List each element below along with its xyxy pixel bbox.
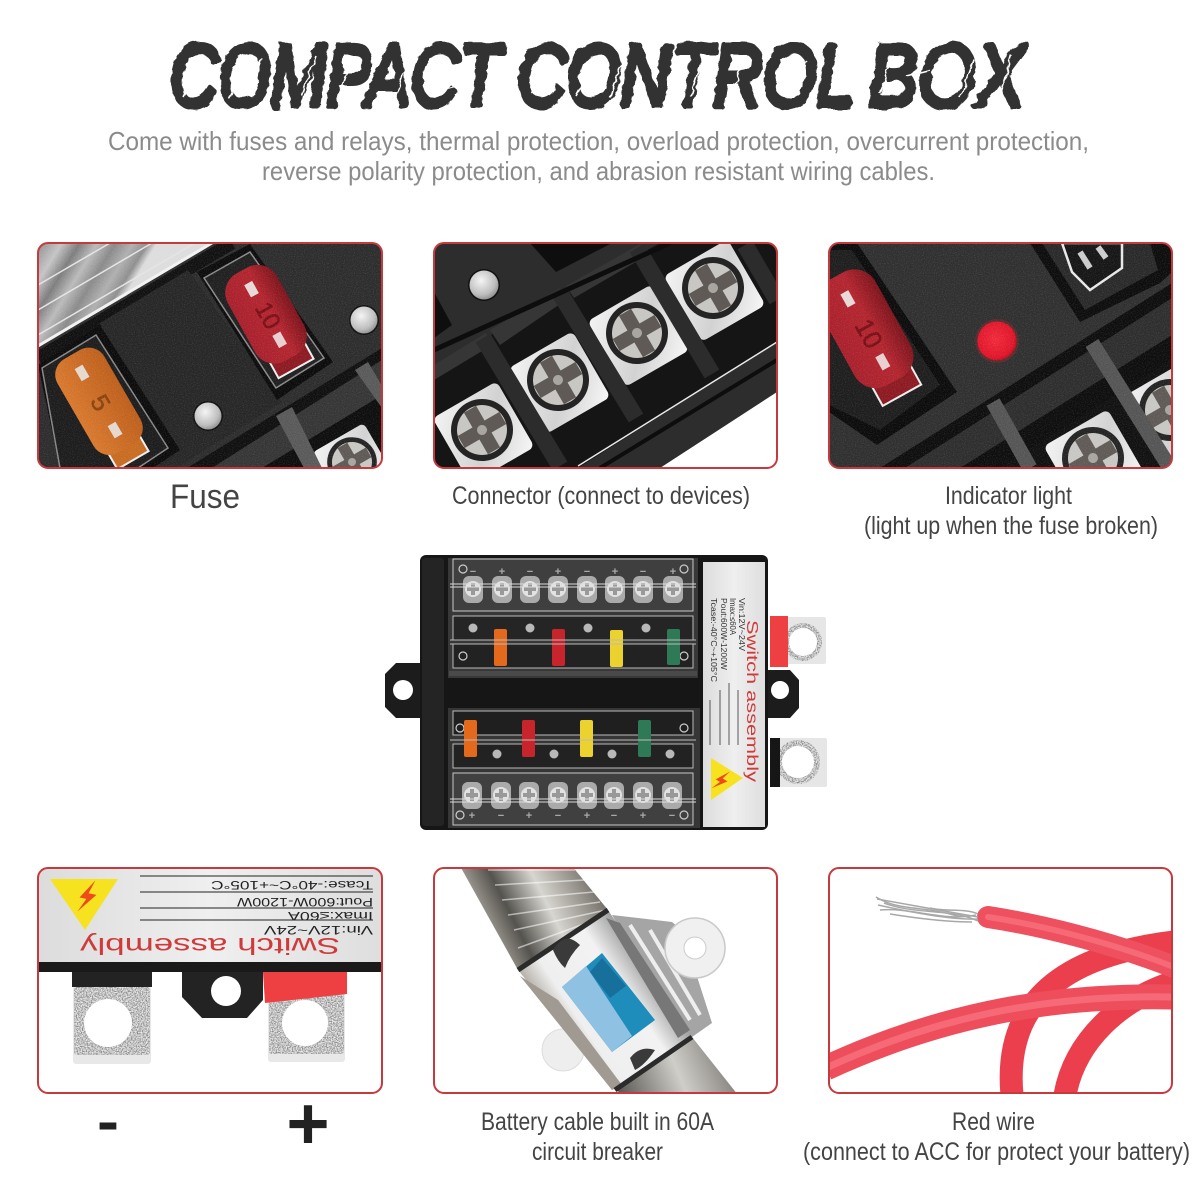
upper clear section: + — [499, 566, 505, 578]
spec label: Imax:≤60A — [728, 598, 738, 635]
red LED — [975, 319, 1019, 363]
label: Indicator light: (light up when the fuse broken) — [864, 512, 1158, 540]
threaded tube bottom — [615, 1037, 738, 1095]
clear cover — [38, 243, 212, 346]
panel: connector photo — [432, 239, 777, 484]
blue fuse — [562, 953, 655, 1052]
label: Fuse: Fuse — [170, 478, 240, 516]
polarity sign: plus: + — [286, 1082, 330, 1165]
red fuse holder — [829, 243, 957, 445]
positive terminal — [770, 616, 826, 667]
terminal screw — [314, 424, 381, 467]
top rails — [435, 334, 487, 380]
rivet — [468, 269, 500, 301]
label: Indicator light — [864, 482, 1158, 540]
warning triangle — [50, 879, 118, 930]
lower clear section — [448, 708, 700, 828]
screw terminals — [1046, 411, 1141, 467]
dark reflections — [553, 939, 580, 968]
threaded tube top — [460, 866, 608, 970]
wire loops — [1011, 942, 1174, 1095]
upper clear section: − — [584, 566, 590, 578]
orange fuse holder — [39, 328, 180, 467]
clear housing — [518, 910, 692, 1090]
lower ear — [542, 1029, 584, 1071]
upper clear section: + — [612, 566, 618, 578]
bracket — [612, 915, 712, 1037]
red fuse — [830, 269, 922, 408]
red fuse holder — [197, 244, 333, 400]
product: control box — [385, 555, 827, 830]
red fuse — [225, 264, 315, 380]
upper clear section: + — [555, 566, 561, 578]
upper clear section — [448, 558, 698, 678]
subtitle: reverse polarity protection, and abrasion resistant wiring cables. — [262, 156, 935, 186]
separators — [993, 343, 1170, 468]
negative terminal — [770, 738, 827, 787]
upper clear section: + — [670, 566, 676, 578]
upper clear section: − — [640, 566, 646, 578]
panel: fuse photo — [37, 242, 383, 469]
label: Red wire: Red wire — [952, 1108, 1035, 1136]
subtitle: Come with fuses and relays, thermal protection, overload protection, overcurrent protection, — [108, 126, 1089, 156]
spec lines — [140, 876, 373, 920]
title: BOX — [868, 26, 1028, 125]
negative lug — [73, 986, 151, 1064]
lower clear section: + — [640, 810, 646, 822]
upside-down spec text: Vin:12V~24V — [263, 923, 373, 935]
title — [170, 26, 1028, 125]
lower clear section: − — [669, 810, 675, 822]
red fuse: 10 — [249, 298, 286, 334]
upper clear section: − — [527, 566, 533, 578]
panel: circuit breaker photo — [434, 866, 777, 1095]
lower clear section: + — [469, 810, 475, 822]
label: Battery cable — [481, 1108, 714, 1166]
label: Battery cable: circuit breaker — [532, 1138, 663, 1166]
upside-down spec text: Pout:600W-1200W — [237, 895, 373, 907]
orange fuse: 5 — [84, 390, 116, 416]
upside-down spec text — [211, 878, 373, 935]
top wire — [988, 917, 1174, 967]
red fuse: 10 — [849, 314, 889, 353]
front edge — [578, 342, 777, 468]
top fuse holder — [1030, 243, 1172, 322]
positive lug — [268, 990, 345, 1062]
lower clear section: − — [555, 810, 561, 822]
ears — [385, 663, 420, 718]
label: Connector: Connector (connect to devices) — [452, 482, 750, 510]
lower clear section: − — [498, 810, 504, 822]
panel: terminals photo: Switch assembly — [79, 933, 340, 959]
center plate — [100, 270, 191, 328]
spec label — [703, 562, 765, 827]
panel: red wire photo — [826, 868, 1174, 1095]
mounting ear — [182, 972, 263, 1018]
upper clear section: − — [470, 566, 476, 578]
spec label: Vin:12V~24V — [737, 598, 747, 651]
upside-down spec text: Tcase:-40°C~+105°C — [211, 878, 373, 890]
polarity sign: minus: - — [97, 1089, 119, 1154]
small holders — [530, 243, 612, 272]
lower clear section: + — [584, 810, 590, 822]
lower wire — [826, 997, 1174, 1068]
title: COMPACT — [170, 26, 504, 125]
spec label: Pout:600W-1200W — [719, 598, 729, 670]
label: Red wire — [803, 1108, 1190, 1166]
lower clear section: − — [611, 810, 617, 822]
spec label: Tcase:-40°C~+105°C — [709, 598, 719, 682]
body — [420, 555, 768, 830]
upside-down spec text: Imax:≤60A — [287, 909, 373, 921]
stripped strands — [876, 897, 978, 922]
panel: terminals photo — [38, 868, 382, 1093]
separators — [483, 245, 777, 466]
label: Battery cable: Battery cable built in 60A — [481, 1108, 714, 1136]
title: CONTROL — [517, 26, 855, 125]
subtitle — [108, 126, 1089, 186]
upper ear — [665, 918, 725, 978]
label: Indicator light: Indicator light — [945, 482, 1072, 510]
panel: indicator light photo — [828, 242, 1173, 469]
orange fuse — [55, 348, 150, 467]
rivets — [349, 305, 379, 335]
lower clear section: + — [526, 810, 532, 822]
spec label: Switch assembly — [743, 620, 760, 782]
screw terminals — [435, 383, 532, 467]
